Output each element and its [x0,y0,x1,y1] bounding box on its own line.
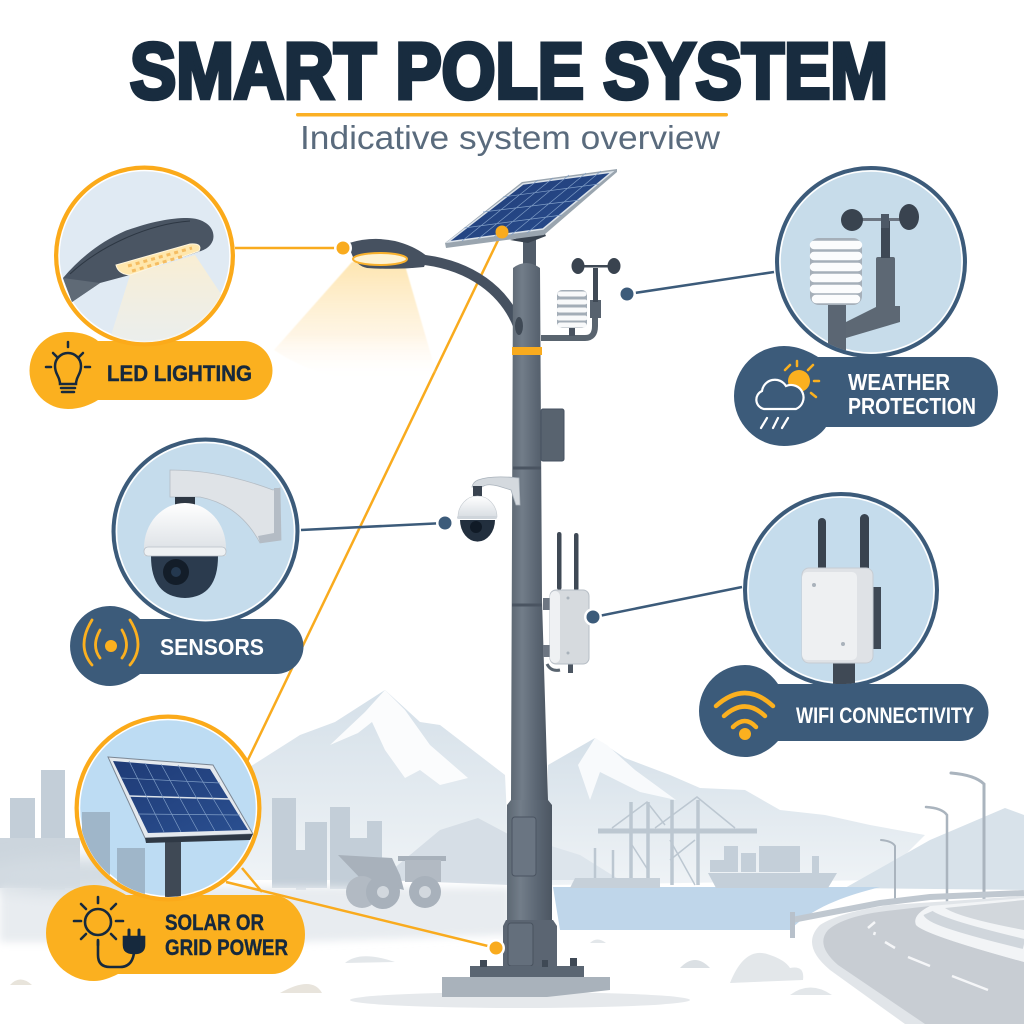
shrubs and rocks [10,940,832,1008]
connector dot: sensors [301,514,454,532]
base door [508,923,533,966]
label: sensors: SENSORS [160,634,264,660]
circle: camera detail [114,440,298,624]
label: protection: PROTECTION [848,393,976,419]
road [790,893,1024,1024]
panel: solar or grid power [46,717,505,981]
pill: solar or grid power [46,885,305,981]
connector: solar panel to solar circle [244,232,502,768]
wifi router [543,532,589,673]
pill: led lighting [30,332,273,409]
container ship [708,846,837,888]
lamp head [349,239,428,269]
label: solar or: SOLAR OR [165,910,264,935]
ground mist [0,885,510,942]
port cranes [570,797,757,888]
orange band [512,347,542,355]
circle: anemometer detail [777,168,965,360]
concrete foundation [442,977,610,997]
lamp arm [425,260,519,328]
neck [523,238,536,268]
connector dot: weather [618,272,774,303]
background landscape [0,690,1024,1024]
circle: led lamp detail [56,168,232,345]
circle: solar panel detail [77,717,259,903]
smart pole [349,169,620,997]
label: grid power: GRID POWER [165,935,288,960]
panel: weather protection [618,168,998,446]
connector: solar circle to pole base [226,868,496,948]
anchor bolts [480,958,577,967]
street lamps [881,773,984,920]
connector dot: wifi [584,587,742,626]
icon: wifi [716,693,773,740]
connector dot: led lighting [235,239,352,257]
control box [541,409,564,461]
icon: signal waves [84,620,138,665]
connector dot: power [487,939,505,957]
pill: weather protection [734,346,998,446]
title: SMART POLE SYSTEM [130,26,888,115]
service door [512,817,536,876]
pole joints [512,468,542,605]
label: led lighting: LED LIGHTING [107,361,252,386]
mountains [230,690,1024,890]
icon: sun and cloud [756,361,819,428]
label: wifi connectivity: WIFI CONNECTIVITY [796,703,974,728]
pole shaft [511,263,548,800]
pill: wifi connectivity [699,665,989,757]
icon: light bulb [46,342,90,392]
light beam [274,262,436,382]
base plate [470,966,584,977]
subtitle: Indicative system overview [300,119,720,156]
camera [457,477,520,542]
city skyline [0,770,382,890]
circle: wifi router detail [745,494,937,690]
icon: sun and plug [74,897,144,967]
panel: sensors [70,440,454,686]
pole solar panel [445,169,617,248]
weather station [541,258,620,338]
label: weather: WEATHER [848,369,950,395]
pill: sensors [70,606,304,686]
panel: wifi connectivity [584,494,989,757]
panel: led lighting [30,168,352,409]
water [553,887,880,930]
lamp lens [353,253,407,265]
pole base sections [507,800,552,920]
arm collar [515,317,523,335]
connector dot: solar panel [496,226,508,238]
title underline [296,113,728,116]
mining truck [338,855,446,909]
